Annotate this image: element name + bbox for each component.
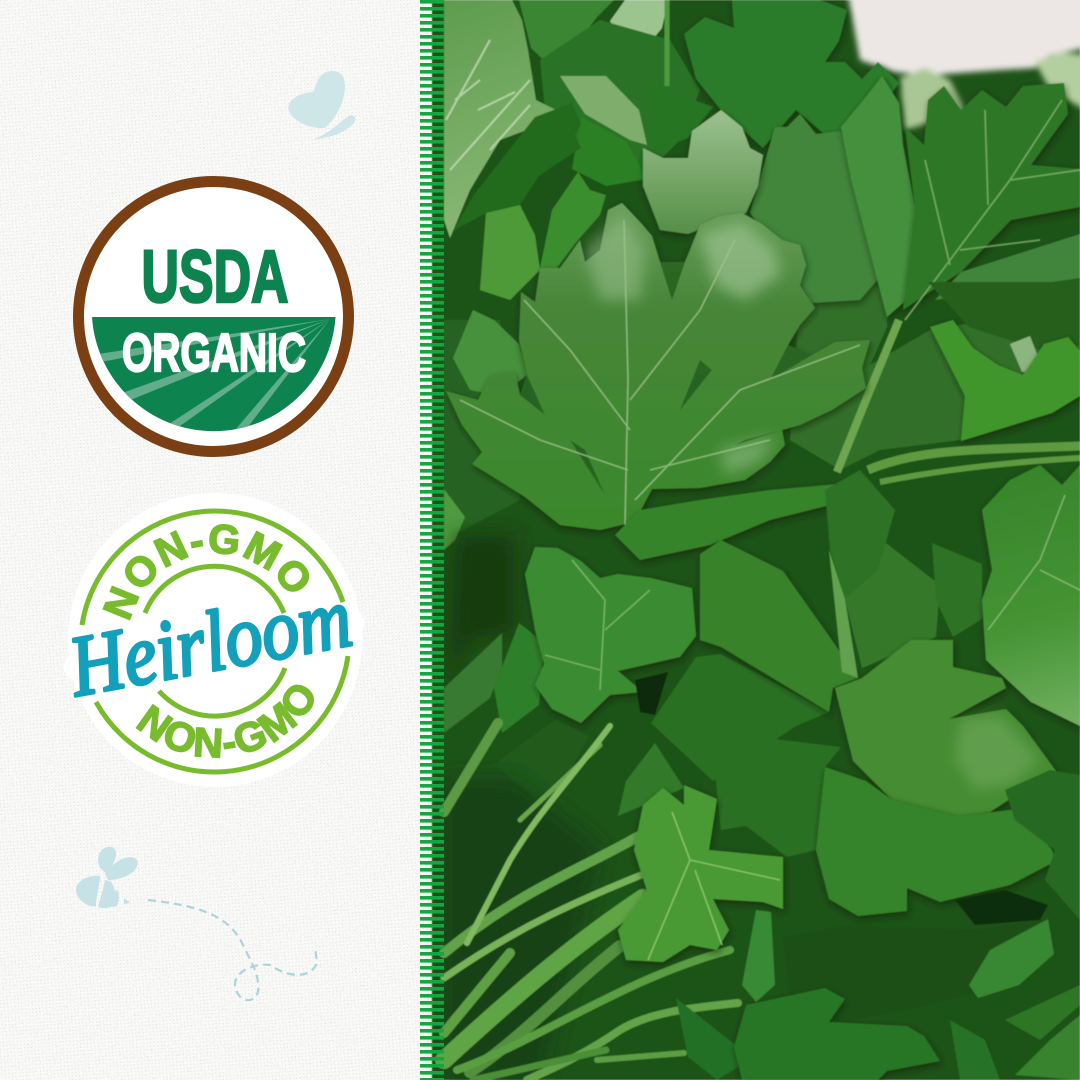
leaf: centre low dark [713, 733, 841, 857]
leaf: lower left dark [494, 719, 589, 799]
leaf: top back green [540, 20, 700, 180]
leaf: parsley centre sprig [525, 547, 696, 723]
leaf: top centre [684, 0, 899, 148]
leaf: central lobe sinuses [520, 262, 812, 495]
leaf: bright centre-low flat-leaf [618, 785, 783, 962]
photo backdrop [432, 0, 1080, 1080]
seal word USDA: USDA [142, 235, 288, 318]
seal field rays [98, 319, 330, 440]
seal word ORGANIC: ORGANIC [122, 323, 306, 383]
leaf: right edge dark [1005, 770, 1080, 920]
leaf: mid bright [700, 540, 858, 712]
badge text NON-GMO top: NON-GMO [102, 524, 310, 620]
leaf: parsley veins [545, 560, 650, 690]
leaf: right lower shine [955, 715, 1040, 790]
fabric background [0, 0, 436, 1080]
leaf: far left mid strip [444, 320, 520, 540]
badge text NON-GMO bottom: NON-GMO [136, 684, 314, 758]
badge white backing [57, 493, 371, 787]
stem: right diagonal [837, 320, 899, 472]
leaf: top right large [903, 83, 1080, 310]
shadow: very dark pocket [955, 890, 1048, 925]
leaf: under central horizontal [615, 483, 850, 560]
green striped edge [420, 0, 444, 1080]
leaf: right low large [816, 767, 1056, 916]
leaf: bottom small dark [676, 998, 738, 1080]
Non-GMO heirloom badge [61, 493, 364, 787]
seal green field [92, 317, 336, 431]
leaf: lower left bright fragment [444, 489, 465, 550]
seal ring [78, 182, 348, 452]
leaf: lower left bright sprig [494, 623, 544, 733]
leaf: upper centre pale lobes [643, 110, 763, 234]
leaf: upper centre right [750, 114, 887, 303]
leaf: bottom wide [734, 988, 940, 1080]
leaf: bright dark green [572, 117, 647, 186]
leaf: top left dark leaf [453, 103, 581, 231]
leaf: small pointed [618, 743, 684, 816]
leaf: top left pale leaf [444, 0, 560, 238]
leaf: top left back [519, 0, 614, 72]
leaf: right mid bright [930, 320, 1080, 441]
leaf: left small sprig [453, 310, 527, 396]
leaf: left lower fragment [444, 633, 502, 733]
icon: bee with dashed flight trail [76, 847, 317, 1000]
leaf: right lower light [835, 640, 1056, 816]
leaf: top right under [935, 234, 1080, 300]
leaf: central large [446, 203, 870, 530]
leaf: pale middle [560, 76, 647, 145]
leaf: vertical fold [829, 550, 858, 678]
leaf: bright flat-leaf veins [648, 812, 780, 960]
leaf: top left shine strokes [446, 40, 530, 170]
leaf: upper mid right [825, 470, 895, 599]
shadow: lower left dark between stems [444, 780, 600, 1080]
badge outer rings [82, 511, 348, 772]
leaf: right pale patch [1010, 336, 1044, 372]
USDA organic seal [78, 182, 348, 452]
leaf: central shine [585, 215, 780, 475]
leaf: right shaded band [928, 278, 1080, 350]
leaf: right inner [932, 543, 982, 637]
badge script word Heirloom: Heirloom [61, 569, 359, 715]
stems: bottom left bundle [444, 723, 738, 1080]
photo: fresh parsley leaves [432, 0, 1080, 1080]
leaf: central veins [460, 220, 860, 525]
shadow: left dark pocket [448, 535, 515, 690]
hidden arcs for curved text [98, 553, 332, 757]
leaf: upper bright stub [480, 205, 540, 300]
leaf: lower dark mass [783, 919, 1052, 1022]
leaf: right large veins [988, 495, 1080, 630]
leaf: mid shaded [651, 654, 829, 781]
leaf: top mid [647, 83, 713, 152]
leaf: lower right bright [969, 919, 1054, 998]
leaf: mid right darker [845, 543, 940, 668]
blurred pale background [848, 0, 1080, 130]
leaf: top right veins [905, 100, 1080, 320]
leaf: lower sprout [742, 910, 775, 1002]
shadow: dark gap under sprig [635, 672, 668, 715]
stem: right horizontal pair [868, 446, 1080, 482]
leaf: pale top fragment [610, 0, 668, 55]
leaf: right large bright [982, 465, 1080, 726]
leaf: bottom right pieces [950, 985, 1080, 1080]
leaf: upper right mid back [790, 234, 1080, 470]
leaf: upper sprout [540, 172, 606, 280]
icon: butterfly [288, 71, 355, 139]
stem: top [664, 0, 670, 86]
leaf: upper right sprig [841, 76, 940, 317]
